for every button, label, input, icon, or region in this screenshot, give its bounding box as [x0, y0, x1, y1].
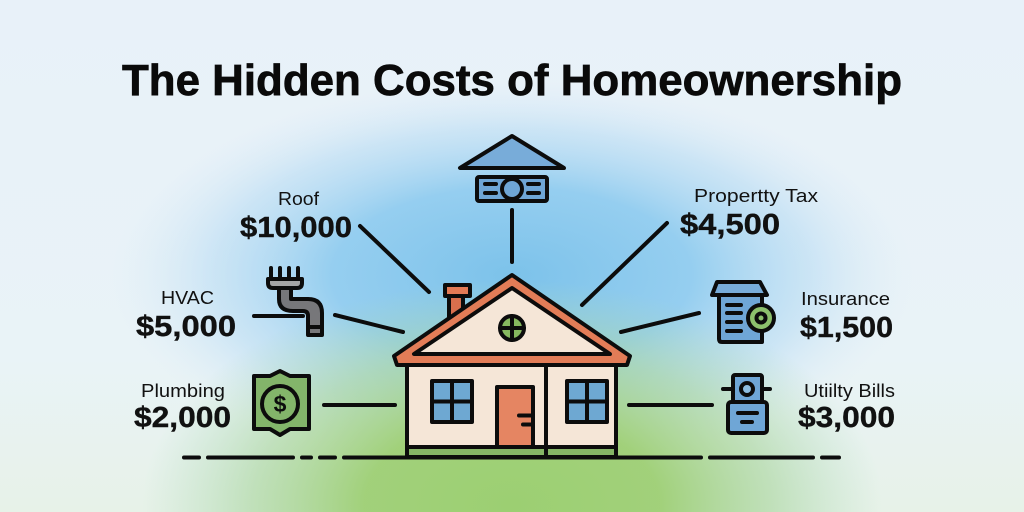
label: Utility Bills: Utiilty Bills — [804, 381, 895, 401]
label: Plumbing: Plumbing — [141, 381, 225, 401]
right window — [567, 381, 607, 422]
icon: money: $ — [274, 391, 287, 417]
label: Plumbing — [134, 381, 231, 434]
icon: faucet — [254, 268, 322, 335]
ground line — [184, 456, 839, 460]
icon: utility meter — [723, 375, 770, 433]
connector lines — [324, 210, 712, 405]
label: Utility Bills: $3,000 — [798, 402, 895, 434]
door — [497, 387, 533, 447]
foundation — [407, 447, 616, 457]
label: Insurance: Insurance — [801, 289, 890, 309]
walls — [407, 362, 616, 457]
label: Roof — [240, 189, 352, 244]
label: Property Tax: Propertty Tax — [694, 186, 818, 206]
icon: money — [254, 371, 309, 435]
gable — [414, 288, 610, 354]
label: HVAC: $5,000 — [136, 311, 236, 343]
roof — [394, 275, 630, 365]
label: Property Tax: $4,500 — [680, 209, 780, 241]
round window — [500, 316, 524, 340]
title: The Hidden Costs of Homeownership — [122, 56, 902, 105]
label: Roof: Roof — [278, 189, 320, 209]
icon: insurance document — [712, 282, 774, 342]
label: Insurance: $1,500 — [800, 312, 893, 344]
label: Roof: $10,000 — [240, 212, 352, 244]
chimney — [445, 285, 470, 324]
label: HVAC — [136, 288, 236, 343]
house — [394, 275, 630, 457]
label: Utility Bills — [798, 381, 895, 434]
icon: top roof and banknote — [460, 136, 564, 201]
left window — [432, 381, 472, 422]
label: HVAC: HVAC — [161, 288, 214, 308]
divider — [544, 362, 548, 457]
label: Property Tax — [680, 186, 818, 241]
label: Plumbing: $2,000 — [134, 402, 231, 434]
label: Insurance — [800, 289, 893, 344]
